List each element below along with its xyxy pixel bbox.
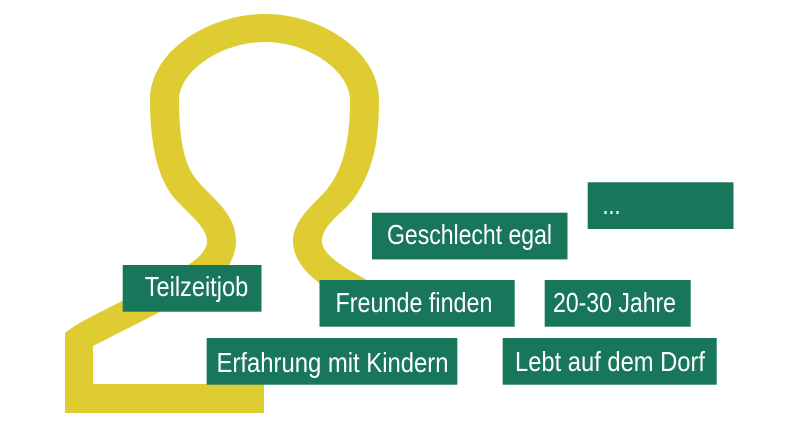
label: Geschlecht egal: Geschlecht egal (387, 219, 552, 250)
label: 20-30 Jahre: 20-30 Jahre (553, 287, 676, 318)
label: Freunde finden: Freunde finden (336, 287, 492, 318)
label: Erfahrung mit Kindern (207, 338, 457, 385)
label: Erfahrung mit Kindern: Erfahrung mit Kindern (216, 347, 448, 378)
label: Lebt auf dem Dorf (503, 338, 717, 385)
label: Teilzeitjob: Teilzeitjob (145, 271, 248, 302)
label: ellipsis: ... (602, 189, 620, 220)
label: ellipsis (588, 182, 734, 229)
label: Lebt auf dem Dorf: Lebt auf dem Dorf (515, 346, 705, 377)
icon: yellow person silhouette outline (65, 14, 379, 413)
label: Teilzeitjob (123, 265, 262, 312)
label: Geschlecht egal (372, 213, 568, 259)
label: 20-30 Jahre (545, 280, 691, 327)
label: Freunde finden (320, 280, 515, 327)
